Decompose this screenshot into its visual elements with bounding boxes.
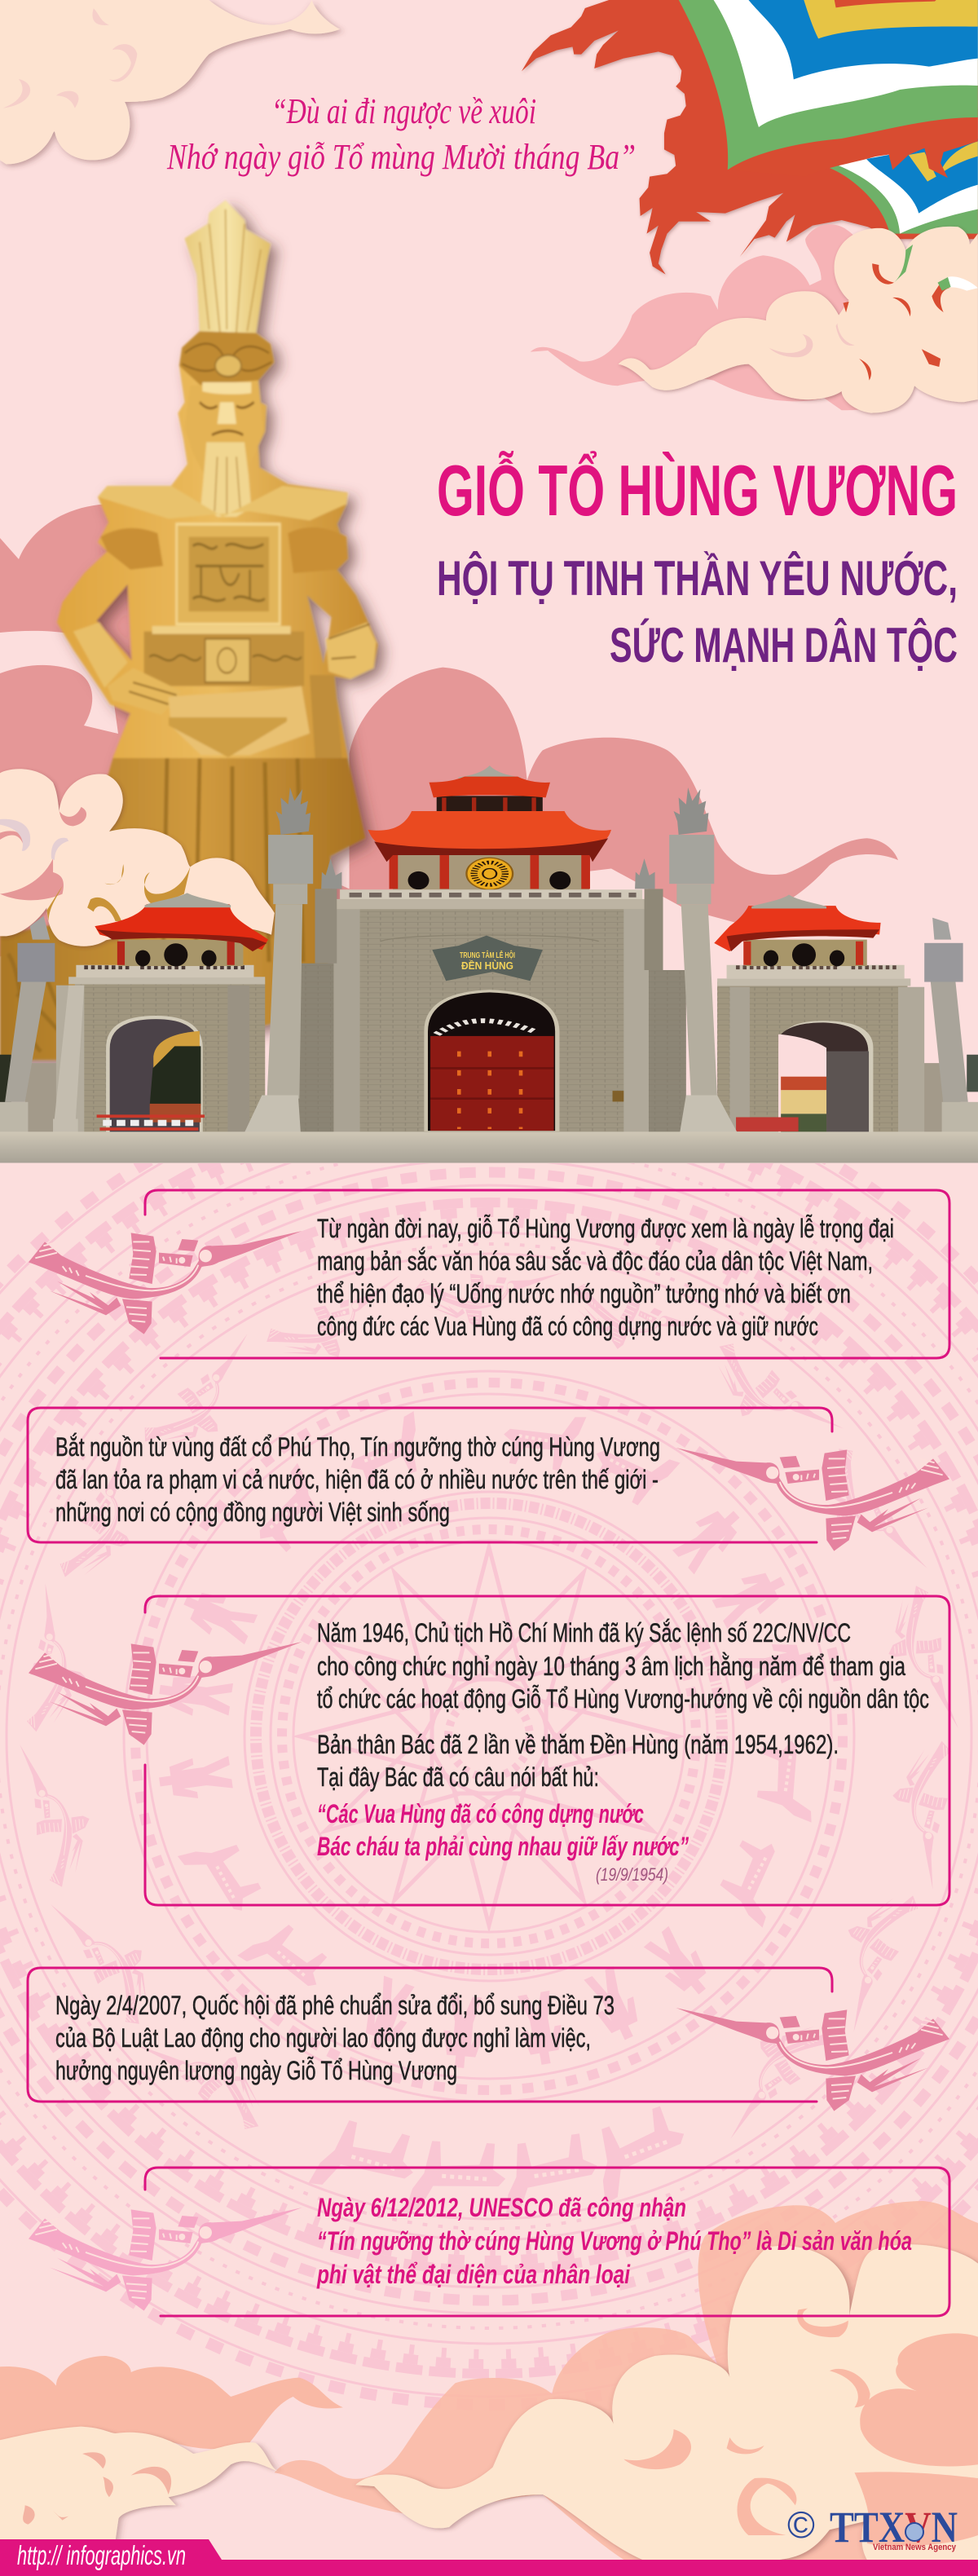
agency name: Vietnam News Agency (873, 2543, 957, 2552)
bronze drum background pattern (0, 1068, 978, 2405)
panel 5 text (316, 2193, 912, 2289)
statue: King Hùng (0, 201, 377, 1060)
panel 3: President Hồ Chí Minh decree (29, 1596, 949, 1905)
panel 4: National Assembly holiday (28, 1968, 949, 2111)
temple name plaque (460, 950, 515, 972)
panel 3 frame (145, 1596, 949, 1905)
panel 2 text (55, 1432, 660, 1527)
panel 4 text (55, 1991, 615, 2085)
right cream cloud (355, 2244, 978, 2560)
panel 1 text (317, 1214, 894, 1341)
panel 5: UNESCO recognition (29, 2168, 949, 2316)
copyright mark: © (787, 2503, 815, 2546)
cloud: bottom salmon and cream (0, 2201, 978, 2560)
belt (144, 632, 304, 686)
icon: bird mirrored (676, 2008, 949, 2111)
sleeve shading (100, 527, 348, 573)
panel 5 frame (145, 2168, 949, 2316)
pillars (0, 787, 978, 1132)
panel 2: origin in Phú Thọ (28, 1408, 949, 1551)
upper body (57, 201, 377, 758)
apron tip (169, 717, 287, 757)
panel 3 text (317, 1618, 929, 1792)
shoulder cape (98, 486, 348, 520)
panel 2 text: những nơi có cộng đồng người Việt sinh sống (55, 1498, 450, 1527)
turban (179, 331, 274, 386)
right tower (714, 894, 924, 1132)
quote (166, 91, 636, 177)
mauve left lobe (0, 505, 187, 815)
cloud cut-outs (623, 2309, 978, 2546)
left hand and bracer (73, 622, 128, 688)
panel 5 text: phi vật thể đại diện của nhân loại (316, 2260, 631, 2289)
cloud: cream left over statue (0, 769, 275, 946)
panel 4 text: hưởng nguyên lương ngày Giỗ Tổ Hùng Vương (55, 2056, 457, 2085)
cloud lobes rising into panel 5: salmon (698, 2201, 978, 2364)
Bác Hồ quote: Bác cháu ta phải cùng nhau giữ lấy nước” (317, 1832, 689, 1861)
icon: bird (29, 1642, 302, 1745)
temple name plaque: TRUNG TÂM LỄ HỘI (460, 950, 515, 960)
panel 4 frame (28, 1968, 832, 2102)
quote: “Đù ai đi ngược về xuôi (271, 91, 536, 131)
ground (0, 1131, 978, 1162)
main flag stripes (679, 0, 978, 170)
lower robe (0, 754, 365, 1060)
cloud: top left (0, 0, 340, 165)
quote: Nhớ ngày giỗ Tổ mùng Mười tháng Ba” (166, 137, 636, 177)
icon: bird mirrored (676, 1448, 949, 1551)
chest plate (177, 524, 280, 624)
flames (522, 0, 978, 275)
right salmon cloud (275, 2327, 978, 2560)
panel 1 frame (145, 1190, 949, 1358)
panel 4 text: Ngày 2/4/2007, Quốc hội đã phê chuẩn sửa đổi, bổ sung Điều 73 (55, 1991, 615, 2020)
pink back cloud (531, 224, 900, 410)
temple name plaque: ĐỀN HÙNG (461, 959, 513, 972)
panel 1: ancestral day meaning (29, 1190, 949, 1358)
left tower (56, 893, 268, 1132)
footer bar (0, 2539, 978, 2576)
icon: bird pale (29, 2208, 302, 2311)
background walls (25, 1063, 75, 1132)
panel 2 text: đã lan tỏa ra phạm vi cả nước, hiện đã có ở nhiều nước trên thế giới - (55, 1465, 659, 1494)
panel 2 frame (28, 1408, 832, 1542)
right fist (326, 622, 377, 679)
mauve right lobes (0, 668, 898, 956)
subtitle (437, 551, 958, 673)
left cream cloud (0, 2427, 278, 2541)
logotype: TTXVN (830, 2503, 958, 2552)
small flag (827, 152, 978, 234)
left salmon cloud (0, 2356, 343, 2454)
face (185, 381, 263, 479)
lower cloud group (0, 2244, 978, 2560)
panel 2 text: Bắt nguồn từ vùng đất cổ Phú Thọ, Tín ngưỡng thờ cúng Hùng Vương (55, 1432, 660, 1462)
pale crescent (0, 631, 118, 734)
sash and apron (169, 686, 310, 755)
footer url: http:// infographics.vn (17, 2540, 186, 2570)
globe (905, 2523, 923, 2541)
Bác Hồ quote: “Các Vua Hùng đã có công dựng nước (317, 1799, 644, 1828)
Bác Hồ quote (317, 1799, 689, 1861)
panel 3 text: Tại đây Bác đã có câu nói bất hủ: (317, 1762, 599, 1792)
quote date: (19/9/1954) (596, 1864, 668, 1885)
beard (201, 442, 251, 517)
central building upper pavilion (368, 765, 611, 891)
panel 5 text: Ngày 6/12/2012, UNESCO đã công nhận (317, 2193, 686, 2222)
panel 4 text: của Bộ Luật Lao động cho người lao động được nghỉ làm việc, (55, 2023, 591, 2053)
main flag red band (728, 108, 978, 178)
TTXVN logo (787, 2503, 958, 2552)
cloud: mauve behind statue and temple (0, 505, 898, 956)
temple: Đền Hùng gate (0, 765, 978, 1162)
cloud: top right pink and cream (531, 224, 978, 413)
cream front cloud (619, 227, 978, 413)
flag: festival banner with flames (522, 0, 978, 275)
icon: bird (29, 1231, 302, 1334)
central building wall (333, 889, 649, 1132)
crown (185, 201, 271, 333)
